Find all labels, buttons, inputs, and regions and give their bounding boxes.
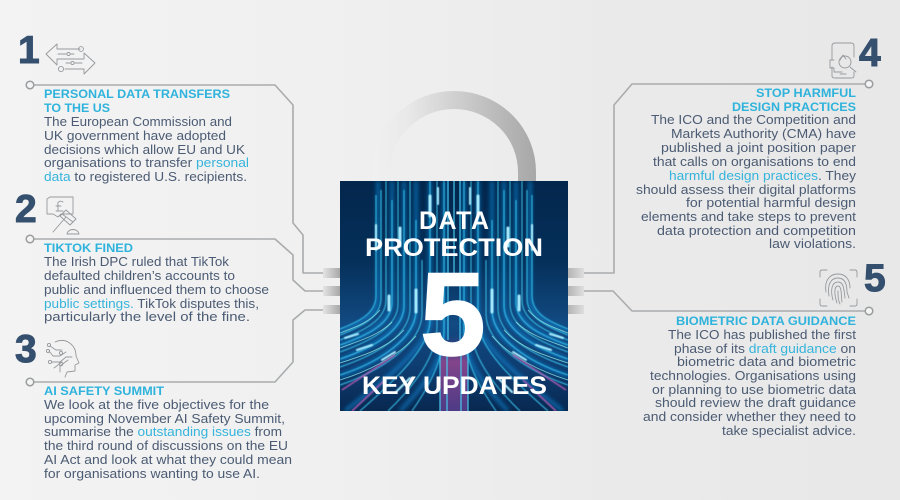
heading: BIOMETRIC DATA GUIDANCE (676, 314, 856, 328)
body text: The ICO has published the first (668, 328, 857, 342)
number 1: 1 (18, 29, 40, 72)
body text: or planning to use biometric data (652, 383, 856, 397)
title line: data: DATA (419, 207, 489, 235)
body text: AI Act and look at what they could mean (44, 453, 292, 467)
body text: should assess their digital platforms (636, 183, 856, 197)
body text: take specialist advice. (722, 424, 856, 438)
body text: public and influenced them to choose (44, 283, 269, 297)
icon: fingerprint (820, 270, 857, 306)
body text: the third round of discussions on the EU (44, 439, 288, 453)
body text: Markets Authority (CMA) have (671, 127, 856, 141)
title line: protection: PROTECTION (365, 234, 543, 262)
node (26, 235, 34, 243)
body text: and consider whether they need to (643, 410, 856, 424)
body text: for potential harmful design (686, 196, 856, 210)
body text: elements and take steps to prevent (641, 210, 857, 224)
body text: data protection and competition (657, 224, 856, 238)
heading: TO THE US (44, 101, 110, 115)
connector line (34, 239, 323, 291)
connector line (34, 85, 323, 273)
node (26, 378, 34, 386)
body text: for organisations wanting to use AI. (44, 467, 260, 481)
body text: that calls on organisations to end (653, 155, 856, 169)
number 3: 3 (15, 328, 37, 371)
padlock shackle (381, 100, 527, 182)
heading: STOP HARMFUL (756, 86, 856, 100)
body text: particularly the level of the fine. (44, 310, 250, 324)
node (865, 307, 873, 315)
heading: PERSONAL DATA TRANSFERS (44, 87, 230, 101)
icon: fine and gavel (47, 197, 79, 234)
body text (636, 113, 857, 251)
body text: harmful design practices . They (669, 169, 857, 183)
connector line (34, 310, 323, 382)
panel: update 3 (15, 310, 323, 481)
body text (44, 115, 249, 184)
title line: key updates: KEY UPDATES (362, 372, 547, 400)
connector tabs left (323, 268, 340, 314)
heading (732, 86, 856, 114)
body text: should review the draft guidance (655, 396, 856, 410)
body text: The European Commission and (44, 115, 232, 129)
body text: organisations to transfer personal (44, 156, 249, 170)
heading: DESIGN PRACTICES (732, 100, 856, 114)
heading: TIKTOK FINED (44, 241, 133, 255)
body text: We look at the five objectives for the (44, 398, 269, 412)
body text: phase of its draft guidance on (674, 342, 856, 356)
body text (643, 328, 857, 438)
number 5: 5 (864, 257, 886, 300)
body text: defaulted children’s accounts to (44, 269, 235, 283)
body text: summarise the outstanding issues from (44, 425, 282, 439)
body text (44, 255, 269, 324)
panel: update 5 (584, 257, 886, 438)
connector line (584, 291, 865, 311)
body text: biometric data and biometric (677, 355, 856, 369)
icon: data transfer arrows (46, 44, 95, 74)
icon: AI head (46, 340, 79, 377)
body text: decisions which allow EU and UK (44, 143, 246, 157)
body text: upcoming November AI Safety Summit, (44, 412, 285, 426)
node (26, 81, 34, 89)
panel: update 4 (584, 32, 881, 273)
connector line (584, 84, 865, 273)
body text (44, 398, 292, 481)
padlock title (362, 207, 547, 400)
node (865, 80, 873, 88)
padlock body with data light streams (340, 181, 568, 411)
body text: data to registered U.S. recipients. (44, 170, 247, 184)
big number five: 5 (420, 249, 486, 381)
body text: public settings. TikTok disputes this, (44, 297, 259, 311)
panel: update 2 (15, 188, 323, 324)
number 2: 2 (15, 188, 37, 231)
body text: technologies. Organisations using (650, 369, 856, 383)
body text: law violations. (769, 237, 856, 251)
body text: The ICO and the Competition and (651, 113, 856, 127)
heading: AI SAFETY SUMMIT (44, 384, 164, 398)
panel: update 1 (18, 29, 323, 273)
body text: published a joint position paper (661, 141, 856, 155)
number 4: 4 (859, 32, 881, 75)
icon: phone and magnifier (830, 43, 856, 78)
heading (44, 87, 230, 115)
body text: UK government have adopted (44, 129, 226, 143)
body text: The Irish DPC ruled that TikTok (44, 255, 230, 269)
connector tabs right (568, 268, 584, 314)
